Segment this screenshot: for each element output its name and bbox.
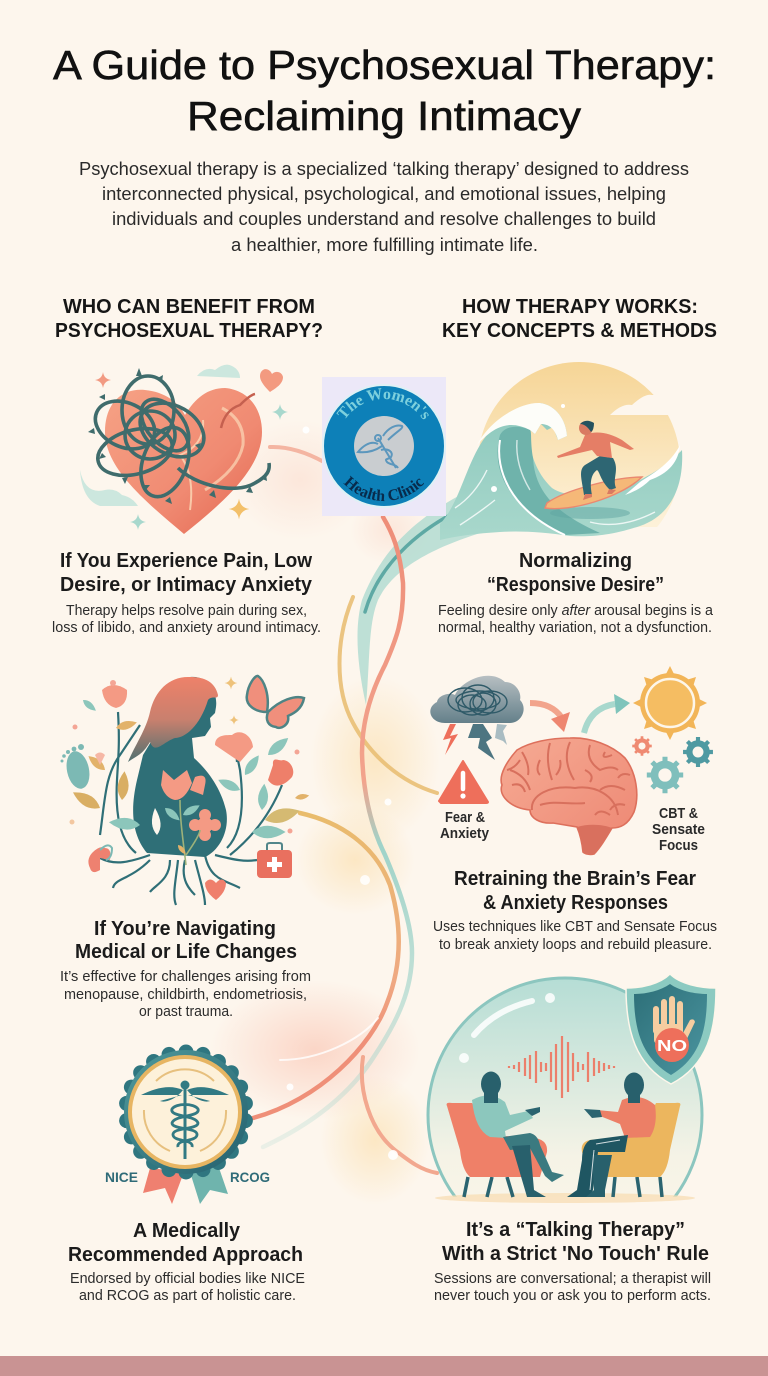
text: medical or life changes: menopause, childbirth, endometriosis, xyxy=(64,987,307,1003)
text: medical or life changes: It’s effective for challenges arising from xyxy=(60,969,311,985)
text: talking therapy no touch rule: Sessions are conversational; a therapist will xyxy=(434,1271,711,1287)
text: responsive desire xyxy=(438,550,714,636)
title: Reclaiming Intimacy xyxy=(187,93,582,139)
right column heading xyxy=(442,296,717,342)
text: responsive desire: “Responsive Desire” xyxy=(487,574,664,596)
text: retraining the brain: & Anxiety Responses xyxy=(483,892,668,914)
left column heading: PSYCHOSEXUAL THERAPY? xyxy=(55,320,323,342)
text: retraining the brain xyxy=(433,868,717,953)
text: responsive desire: Feeling desire only after arousal begins is a xyxy=(438,603,714,619)
text: medical or life changes: Medical or Life Changes xyxy=(75,941,297,963)
text: talking therapy no touch rule: It’s a “Talking Therapy” xyxy=(466,1219,685,1241)
icon: medical badge with caduceus: RCOG xyxy=(230,1169,270,1185)
icon: two people talking inside a bubble with no-touch shield xyxy=(426,975,716,1203)
icon: brain with fear and CBT labels xyxy=(430,666,713,854)
intro paragraph xyxy=(79,159,689,255)
text: medically recommended: Recommended Approach xyxy=(68,1244,303,1266)
sub-element: left sprigs xyxy=(60,680,141,873)
text: medically recommended: and RCOG as part of holistic care. xyxy=(79,1288,296,1304)
intro paragraph: interconnected physical, psychological, and emotional issues, helping xyxy=(102,184,666,204)
text: pain, low desire, anxiety: Desire, or Intimacy Anxiety xyxy=(60,574,313,596)
text: retraining the brain: Retraining the Brain’s Fear xyxy=(454,868,696,890)
icon: surfer on a wave xyxy=(440,362,682,540)
text: pain, low desire, anxiety: Therapy helps resolve pain during sex, xyxy=(66,603,307,619)
sub-element: right sprigs and butterfly xyxy=(205,676,310,900)
sub-element: no-touch shield: NO xyxy=(657,1038,687,1055)
text: medical or life changes: If You’re Navigating xyxy=(94,918,276,940)
icon: medical badge with caduceus xyxy=(105,1044,270,1204)
text: retraining the brain: to break anxiety loops and rebuild pleasure. xyxy=(439,937,712,953)
icon: woman with flowers and roots xyxy=(60,676,310,905)
text: responsive desire: Normalizing xyxy=(519,550,632,572)
right column heading: HOW THERAPY WORKS: xyxy=(462,296,698,318)
icon: brain with fear and CBT labels: Focus xyxy=(659,837,698,854)
sub-element: yellow chair and right person xyxy=(567,1072,680,1197)
text: pain, low desire, anxiety: If You Experience Pain, Low xyxy=(60,550,312,572)
text: pain, low desire, anxiety: loss of libido, and anxiety around intimacy. xyxy=(52,620,321,636)
title: A Guide to Psychosexual Therapy: xyxy=(53,42,716,88)
footer bar xyxy=(0,1356,768,1376)
logo: The Women's Health Clinic: The Women's xyxy=(336,388,429,420)
text: talking therapy no touch rule: With a Strict 'No Touch' Rule xyxy=(442,1243,709,1265)
icon: brain with fear and CBT labels: CBT & xyxy=(659,805,698,822)
text: pain, low desire, anxiety xyxy=(52,550,321,636)
icon: brain with fear and CBT labels: Fear & xyxy=(445,809,485,826)
sub-element: sound wave xyxy=(509,1036,614,1098)
icon: brain with fear and CBT labels: Anxiety xyxy=(440,825,490,842)
icon: brain with fear and CBT labels: Sensate xyxy=(652,821,705,838)
left column heading: WHO CAN BENEFIT FROM xyxy=(63,296,315,318)
text: medical or life changes: or past trauma. xyxy=(139,1004,233,1020)
icon: medical badge with caduceus: NICE xyxy=(105,1169,138,1185)
logo: The Women's Health Clinic: Health Clinic xyxy=(344,476,424,502)
text: medically recommended: Endorsed by official bodies like NICE xyxy=(70,1271,305,1287)
intro paragraph: a healthier, more fulfilling intimate life. xyxy=(231,235,538,255)
sub-element: coral chair and left person xyxy=(447,1072,564,1197)
left column heading xyxy=(55,296,323,342)
text: medically recommended: A Medically xyxy=(133,1220,241,1242)
right column heading: KEY CONCEPTS & METHODS xyxy=(442,320,717,342)
flowing ribbons connecting sections xyxy=(210,420,490,1205)
icon: heart wrapped in thorns xyxy=(80,365,310,534)
text: talking therapy no touch rule: never touch you or ask you to perform acts. xyxy=(434,1288,711,1304)
text: responsive desire: normal, healthy variation, not a dysfunction. xyxy=(438,620,712,636)
text: talking therapy no touch rule xyxy=(434,1219,711,1304)
text: medical or life changes xyxy=(60,918,311,1020)
intro paragraph: Psychosexual therapy is a specialized ‘talking therapy’ designed to address xyxy=(79,159,689,179)
text: retraining the brain: Uses techniques like CBT and Sensate Focus xyxy=(433,919,717,935)
intro paragraph: individuals and couples understand and resolve challenges to build xyxy=(112,209,656,229)
logo: The Women's Health Clinic xyxy=(322,377,446,516)
sub-element: no-touch shield xyxy=(626,974,716,1084)
title xyxy=(53,42,716,139)
text: medically recommended xyxy=(68,1220,305,1304)
